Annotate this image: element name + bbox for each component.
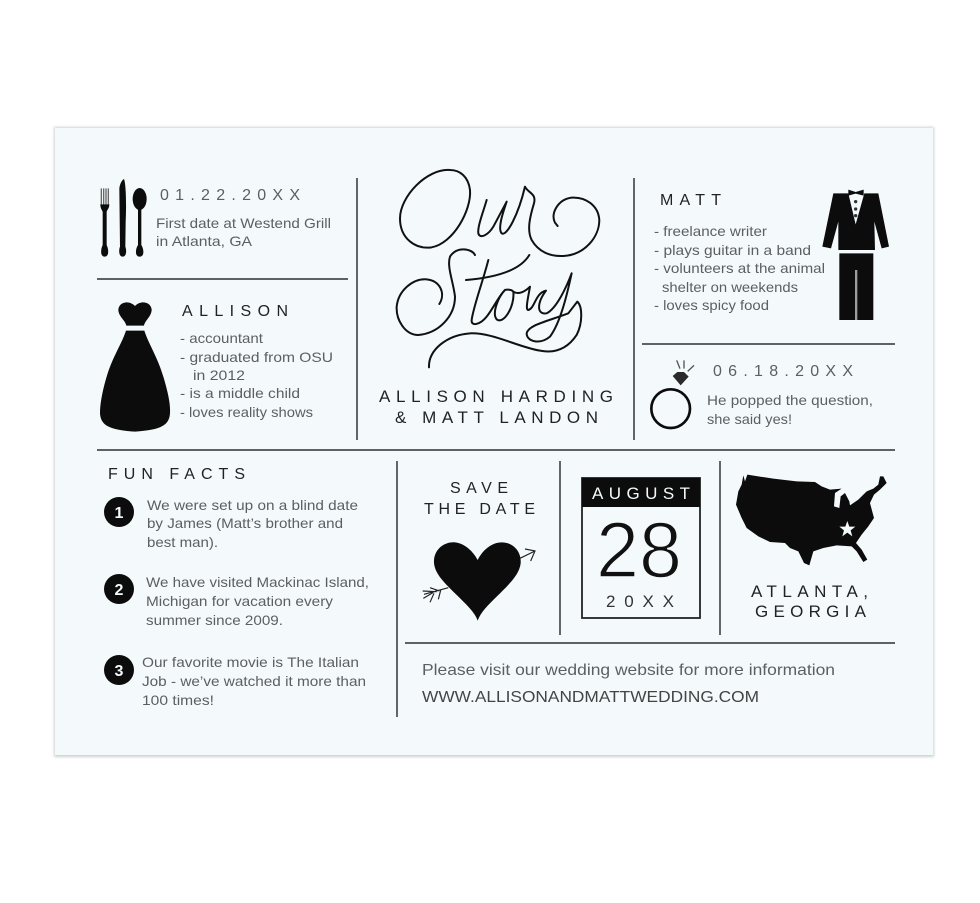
heading: Save the Date [424, 480, 535, 518]
icon: tuxedo [822, 190, 889, 320]
fun fact 3 [104, 654, 366, 708]
list: Allison facts: - graduated from OSU [180, 349, 333, 365]
fun fact 3: Our favorite movie is The Italian [142, 654, 359, 670]
calendar: 20XX [606, 592, 674, 611]
text: proposal details: He popped the question, [707, 392, 873, 408]
list: Matt facts [654, 223, 825, 313]
heading: Save the Date: THE DATE [424, 501, 535, 518]
heading: Save the Date: SAVE [450, 480, 508, 497]
calendar [582, 478, 700, 618]
icon: heart with arrow [423, 542, 535, 621]
list: Allison facts [180, 330, 333, 420]
website note: Please visit our wedding website for more information [422, 662, 835, 679]
title: Our Story script [397, 170, 599, 367]
fun fact 3: 100 times! [142, 692, 214, 708]
icon: dress [100, 302, 170, 432]
list: Allison facts: - accountant [180, 330, 263, 346]
text: proposal details [707, 392, 873, 427]
fun fact 2: 2 [115, 582, 124, 599]
date: proposal: 06.18.20XX [713, 363, 853, 380]
fun fact 2 [104, 574, 369, 628]
list: Allison facts: - is a middle child [180, 385, 300, 401]
text: first date details: in Atlanta, GA [156, 233, 253, 249]
list: Matt facts: - freelance writer [654, 223, 767, 239]
heading: Matt: MATT [660, 192, 721, 209]
fun fact 1 [104, 497, 358, 550]
names: ALLISON HARDING [379, 387, 613, 406]
website note [422, 662, 835, 706]
text: proposal details: she said yes! [707, 411, 792, 427]
location: GEORGIA [755, 602, 867, 621]
fun fact 2: summer since 2009. [146, 612, 283, 628]
fun fact 3: 3 [115, 663, 124, 680]
card background [55, 128, 933, 755]
fun fact 1: by James (Matt’s brother and [147, 515, 343, 531]
heading: Fun Facts: FUN FACTS [108, 466, 245, 483]
names: & MATT LANDON [395, 408, 598, 427]
calendar: 28 [596, 505, 682, 594]
fun fact 1: We were set up on a blind date [147, 497, 358, 513]
website note: WWW.ALLISONANDMATTWEDDING.COM [422, 689, 759, 706]
icon: cutlery [100, 179, 147, 257]
fun fact 1: best man). [147, 534, 218, 550]
list: Matt facts: - volunteers at the animal [654, 260, 825, 276]
names [379, 387, 613, 427]
heading: Allison: ALLISON [182, 303, 288, 320]
calendar: AUGUST [592, 484, 690, 503]
list: Allison facts: - loves reality shows [180, 404, 313, 420]
fun fact 2: Michigan for vacation every [146, 593, 333, 609]
list: Matt facts: - loves spicy food [654, 297, 769, 313]
icon: USA map with star [736, 475, 887, 565]
date: first date: 01.22.20XX [160, 187, 300, 204]
list: Allison facts: in 2012 [193, 367, 245, 383]
icon: ring [651, 360, 694, 428]
fun fact 2: We have visited Mackinac Island, [146, 574, 369, 590]
list: Matt facts: shelter on weekends [662, 279, 798, 295]
location: ATLANTA, [751, 582, 868, 601]
fun fact 3: Job - we’ve watched it more than [142, 673, 366, 689]
list: Matt facts: - plays guitar in a band [654, 242, 811, 258]
location [751, 582, 868, 621]
text: first date details: First date at Westend Grill [156, 215, 331, 231]
fun fact 1: 1 [115, 505, 124, 522]
text: first date details [156, 215, 331, 249]
